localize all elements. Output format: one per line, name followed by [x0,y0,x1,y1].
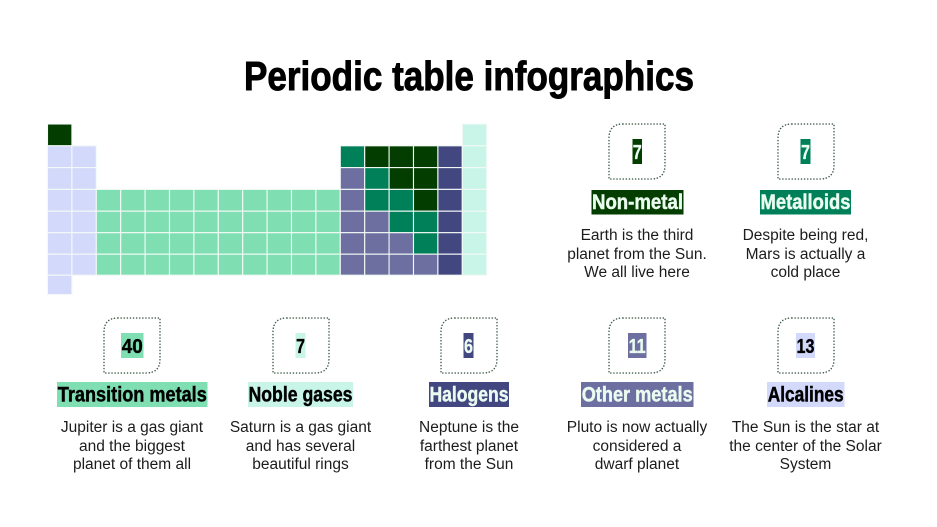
heading: metalloids: Metalloids [760,191,850,214]
text: alcalines description: System [780,456,831,473]
text: alcalines description: The Sun is the star at [732,419,880,436]
icon: halogens count: 6 [464,336,473,358]
panel: alcalines [729,318,882,473]
icon: transition metals count [104,318,160,373]
text: noble gases description: beautiful rings [252,456,349,473]
text: transition metals description: planet of them all [73,456,191,473]
heading: other metals: Other metals [582,384,693,406]
text: transition metals description: and the biggest [79,438,186,455]
text: non-metal description: We all live here [584,264,690,281]
text: metalloids description: Despite being red, [743,227,868,244]
panel: halogens [419,318,519,473]
text: non-metal description: planet from the Sun. [567,246,707,263]
icon: alcalines count [778,318,834,373]
text: non-metal description: Earth is the third [581,227,693,244]
text: metalloids description: Mars is actually a [746,246,866,263]
title: Periodic table infographics [244,53,694,99]
text: halogens description: from the Sun [425,456,513,473]
icon: other metals count [609,318,665,373]
text: transition metals description: Jupiter is a gas giant [61,419,204,436]
icon: halogens count [441,318,497,373]
heading: non-metal: Non-metal [592,191,683,214]
panel: other metals [567,318,707,473]
icon: non-metal count [609,124,665,179]
text: halogens description: Neptune is the [419,419,519,436]
icon: transition metals count: 40 [122,336,143,358]
icon: alcalines count: 13 [796,336,814,358]
panel: non-metal [567,124,707,281]
text: other metals description: dwarf planet [595,456,680,473]
icon: noble gases count: 7 [296,336,305,358]
heading: alcalines: Alcalines [768,384,844,406]
panel: noble gases [230,318,372,473]
icon: other metals count: 11 [629,336,646,358]
panel: transition metals [57,318,208,473]
text: alcalines description: the center of the Solar [729,438,882,455]
text: halogens description: farthest planet [420,438,519,455]
icon: noble gases count [273,318,329,373]
panel: metalloids [743,124,868,281]
text: other metals description: Pluto is now actually [567,419,707,436]
text: noble gases description: Saturn is a gas giant [230,419,372,436]
text: metalloids description: cold place [771,264,840,281]
icon: non-metal count: 7 [633,142,642,164]
icon: metalloids count: 7 [801,142,810,164]
icon: metalloids count [778,124,834,179]
heading: noble gases: Noble gases [248,384,352,406]
text: other metals description: considered a [593,438,682,455]
heading: halogens: Halogens [430,384,508,406]
text: noble gases description: and has several [246,438,355,455]
periodic table grid [48,124,487,294]
heading: transition metals: Transition metals [58,384,207,406]
